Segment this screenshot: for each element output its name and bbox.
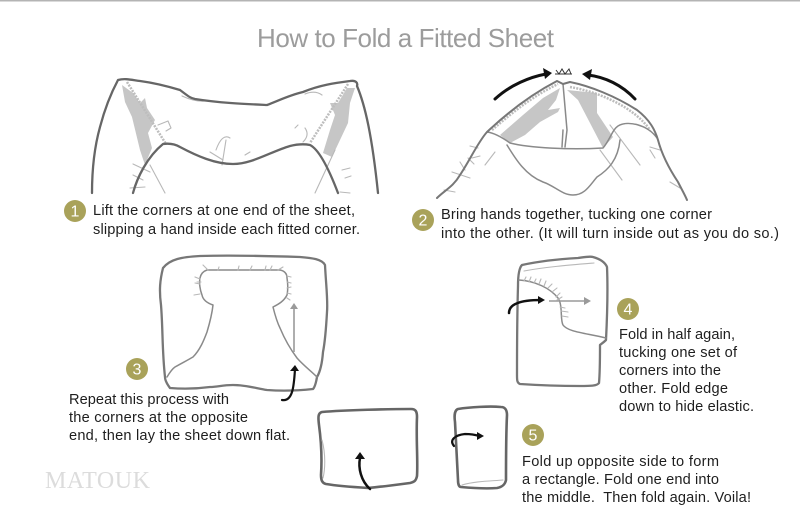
step 3 badge: 3 [133, 362, 142, 378]
step 3 badge [126, 358, 148, 380]
arrow: left curved [495, 68, 552, 99]
icon: meeting mark [555, 69, 572, 74]
step 1 text: slipping a hand inside each fitted corner. [93, 222, 360, 238]
step 4 text: down to hide elastic. [619, 399, 754, 415]
step 3 text: end, then lay the sheet down flat. [69, 428, 290, 444]
arrow: black upward [355, 452, 370, 489]
step 5 badge [522, 424, 544, 446]
arrow: black curved [509, 296, 545, 313]
step 2 badge: 2 [419, 212, 428, 230]
step 4 text: other. Fold edge [619, 381, 728, 397]
arrow: black curved [282, 365, 299, 400]
step 2 badge [412, 209, 434, 231]
arrow: black right [452, 432, 484, 446]
step 3 text [69, 392, 290, 444]
step 2 text: into the other. (It will turn inside out as you do so.) [441, 226, 779, 242]
step 2 text: Bring hands together, tucking one corner [441, 207, 712, 223]
step 5 badge: 5 [529, 428, 538, 444]
step 1 badge [64, 200, 86, 222]
step 4 text [619, 327, 754, 415]
step 1 text: Lift the corners at one end of the sheet, [93, 203, 355, 219]
step 5 text: Fold up opposite side to form [522, 454, 719, 470]
arrow: grey right [549, 297, 591, 305]
step 5 text: the middle. Then fold again. Voila! [522, 490, 751, 506]
arrow: right curved [582, 69, 635, 99]
step 4 text: Fold in half again, [619, 327, 735, 343]
illustration: step 2 bringing hands together [437, 68, 687, 200]
step 1 badge: 1 [71, 204, 80, 220]
title: How to Fold a Fitted Sheet [257, 23, 555, 53]
step 5 text [522, 454, 751, 506]
illustration: step 4 folded in half [509, 257, 607, 386]
illustration: step 3 sheet laid flat [160, 256, 327, 400]
step 5 text: a rectangle. Fold one end into [522, 472, 719, 488]
step 3 text: the corners at the opposite [69, 410, 248, 426]
step 4 text: corners into the [619, 363, 721, 379]
illustration: step 5 rectangle [318, 409, 417, 489]
logo: MATOUK: MATOUK [45, 468, 151, 494]
step 4 badge: 4 [624, 302, 633, 318]
step 3 text: Repeat this process with [69, 392, 229, 408]
illustration: step 1 lifting corners [92, 79, 378, 193]
step 2 text [441, 207, 779, 242]
step 4 text: tucking one set of [619, 345, 738, 361]
step 4 badge [617, 298, 639, 320]
illustration: step 5 folded block [452, 407, 507, 488]
step 1 text [93, 203, 360, 238]
arrow: grey upward [290, 303, 298, 352]
